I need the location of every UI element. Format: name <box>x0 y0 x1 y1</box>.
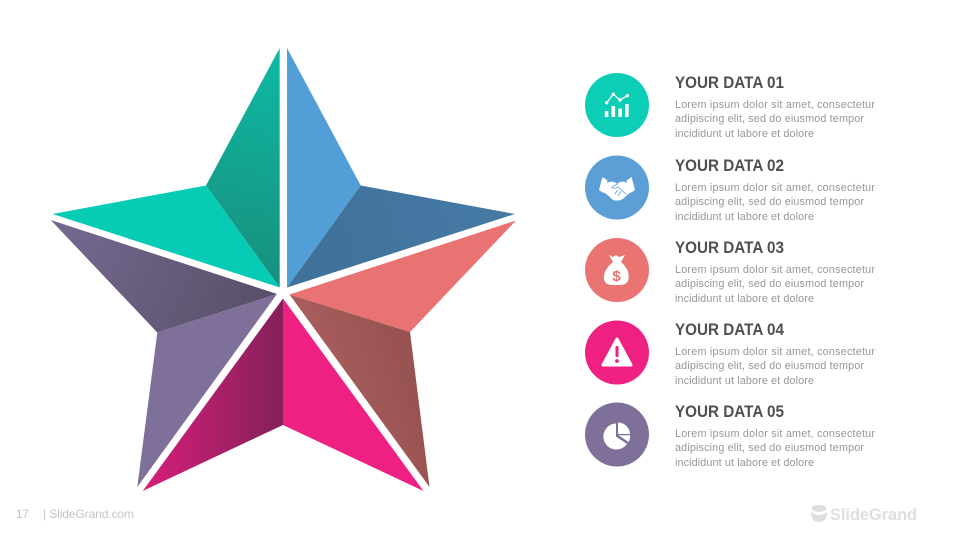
item 01 <box>585 73 875 140</box>
body text <box>675 99 875 140</box>
body text: adipiscing elit, sed do eiusmod tempor <box>675 113 864 125</box>
heading: YOUR DATA 02 <box>675 157 784 175</box>
logo <box>811 505 917 524</box>
icon: handshake <box>585 156 649 220</box>
item 04 <box>585 320 875 387</box>
item 02 <box>585 156 875 223</box>
footer site name: | SlideGrand.com <box>43 507 134 521</box>
body text: adipiscing elit, sed do eiusmod tempor <box>675 360 864 372</box>
icon: logo mark <box>811 505 827 522</box>
body text: incididunt ut labore et dolore <box>675 457 814 469</box>
heading: YOUR DATA 05 <box>675 403 784 421</box>
body text <box>675 182 875 223</box>
body text: incididunt ut labore et dolore <box>675 128 814 140</box>
star point: purple <box>51 220 277 487</box>
body text: incididunt ut labore et dolore <box>675 293 814 305</box>
icon: money bag <box>585 238 649 302</box>
body text: adipiscing elit, sed do eiusmod tempor <box>675 196 864 208</box>
icon: warning triangle <box>585 320 649 384</box>
star point: blue <box>287 48 515 288</box>
icon: pie chart <box>585 402 649 466</box>
heading: YOUR DATA 04 <box>675 321 785 339</box>
body text: Lorem ipsum dolor sit amet, consectetur <box>675 182 875 194</box>
body text: adipiscing elit, sed do eiusmod tempor <box>675 278 864 290</box>
star point: teal <box>52 48 280 288</box>
footer page number: 17 <box>16 507 29 521</box>
item 03 <box>585 238 875 305</box>
star point: pink <box>143 298 423 491</box>
heading: YOUR DATA 03 <box>675 239 784 257</box>
star chart <box>51 48 516 491</box>
item 05 <box>585 402 875 469</box>
logo wordmark: SlideGrand <box>830 505 917 524</box>
body text <box>675 346 875 387</box>
body text: Lorem ipsum dolor sit amet, consectetur <box>675 428 875 440</box>
body text <box>675 264 875 305</box>
body text: Lorem ipsum dolor sit amet, consectetur <box>675 99 875 111</box>
icon: line and bar chart <box>585 73 649 137</box>
body text: incididunt ut labore et dolore <box>675 211 814 223</box>
star point: coral <box>290 220 516 487</box>
body text: Lorem ipsum dolor sit amet, consectetur <box>675 264 875 276</box>
body text: adipiscing elit, sed do eiusmod tempor <box>675 442 864 454</box>
heading: YOUR DATA 01 <box>675 74 784 92</box>
icon: money bag: $ <box>612 268 621 285</box>
body text <box>675 428 875 469</box>
body text: incididunt ut labore et dolore <box>675 375 814 387</box>
body text: Lorem ipsum dolor sit amet, consectetur <box>675 346 875 358</box>
